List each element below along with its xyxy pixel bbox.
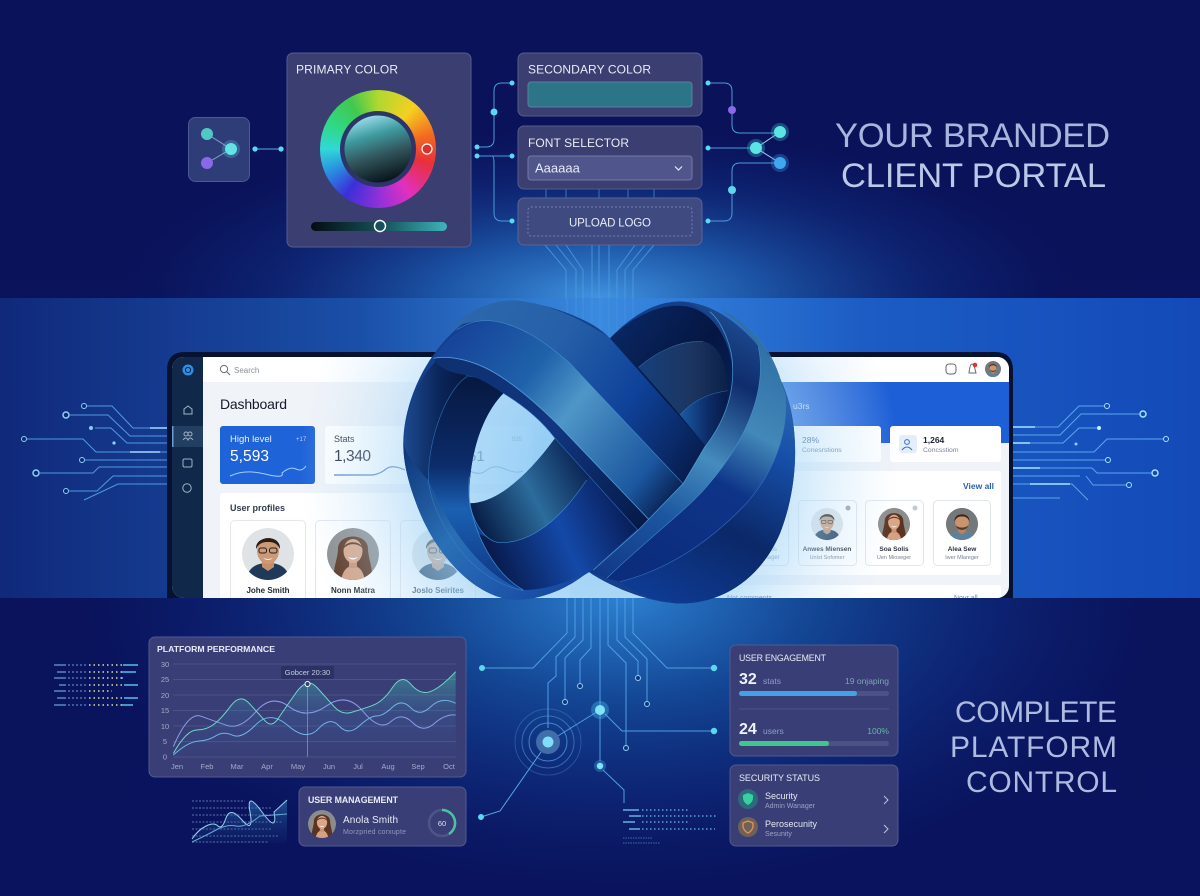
panel: user management xyxy=(299,787,466,846)
panel: font selector: Aaaaaa xyxy=(535,160,581,176)
colour wheel xyxy=(320,90,436,208)
top left icon box xyxy=(188,118,250,182)
panel: user profiles left xyxy=(220,493,464,598)
panel: user management: 60 xyxy=(438,819,446,828)
panel: user profiles right: Soa Solis xyxy=(879,546,909,553)
panel: user profiles right: View all xyxy=(963,481,994,491)
right ring front bands xyxy=(590,302,795,603)
panel: user engagement: 24 xyxy=(739,721,757,738)
title: complete platform control: CONTROL xyxy=(966,766,1117,799)
x axis: Sep xyxy=(411,762,425,771)
top-left bands xyxy=(433,300,705,531)
y axis: 30 xyxy=(161,660,169,669)
left ring lower bands xyxy=(403,359,638,600)
panel: security status: Security xyxy=(765,791,798,801)
chart tooltip: Gobcer 20:30 xyxy=(285,668,330,677)
x axis: Jul xyxy=(353,762,363,771)
panel: upload logo: UPLOAD LOGO xyxy=(569,218,651,230)
panel: user engagement: USER ENGAGEMENT xyxy=(739,653,827,663)
panel: user engagement: 32 xyxy=(739,671,757,688)
x axis: Apr xyxy=(261,762,273,771)
y axis: 0 xyxy=(163,752,167,762)
title: your branded client portal: CLIENT PORTAL xyxy=(841,157,1106,195)
y axis: 25 xyxy=(161,675,169,684)
panel: user engagement: 100% xyxy=(867,726,889,736)
stat card: third: 51 xyxy=(468,448,485,465)
panel: user profiles left: User profiles xyxy=(230,503,285,513)
panel: user profiles right: Iwer Mlareger xyxy=(945,555,979,561)
3D infinity knot logo xyxy=(403,300,795,603)
mini chart xyxy=(192,800,287,843)
panel: secondary color xyxy=(518,53,702,116)
x axis: Jen xyxy=(171,762,183,771)
panel: user profiles right xyxy=(766,471,1001,575)
blue header right xyxy=(782,382,1009,443)
panel: user profiles right: nager xyxy=(764,555,780,561)
stat card: high level: 5,593 xyxy=(230,448,269,465)
right ring inside xyxy=(610,306,733,483)
heading: dashboard: Dashboard xyxy=(220,396,287,412)
panel: user management: USER MANAGEMENT xyxy=(308,795,399,805)
y axis xyxy=(161,660,169,762)
x axis xyxy=(171,762,456,771)
stat card: conversions xyxy=(794,426,881,462)
panel: primary color: PRIMARY COLOR xyxy=(296,62,398,76)
stat card: high level xyxy=(220,426,315,484)
chart tooltip xyxy=(281,666,334,686)
stat card: stats: 1,340 xyxy=(334,448,371,465)
connector: icon to primary colour xyxy=(252,146,284,152)
panel: primary color xyxy=(287,53,471,247)
line chart xyxy=(173,672,456,757)
knot silhouette xyxy=(403,302,795,603)
x axis: Feb xyxy=(201,762,213,771)
title: complete platform control xyxy=(950,696,1117,799)
x axis: May xyxy=(291,762,305,771)
panel: user management: Anola Smith xyxy=(343,815,398,826)
panel: upload logo xyxy=(518,198,702,245)
panel: font selector: FONT SELECTOR xyxy=(528,136,629,150)
panel: lower list card xyxy=(728,585,1001,598)
nodes: glowing dots xyxy=(478,665,717,820)
stat card: high level: High level xyxy=(230,434,272,445)
panel: user engagement: stats xyxy=(763,676,781,686)
panel: user profiles right: Uen Mioseger xyxy=(877,555,911,561)
stat card: 1,264: Concsstiom xyxy=(923,447,959,454)
title: complete platform control: PLATFORM xyxy=(950,731,1117,764)
connectors: primary to right panels xyxy=(474,80,514,224)
decorative data dashes: left xyxy=(54,665,138,705)
top bar: Search xyxy=(234,366,259,375)
panel: user profiles left: Nonn Matra xyxy=(331,586,376,595)
circuit lines: right of tablet xyxy=(1013,404,1168,500)
panel: security status: Perosecunity xyxy=(765,819,818,829)
panel: lower list card: Novr all xyxy=(954,595,978,602)
stat card: 1,264 xyxy=(890,426,1001,462)
panel: user profiles right: Unlst Sofomer xyxy=(810,555,845,561)
panel: lower list card: Not comments xyxy=(727,595,773,602)
stat card: 1,264: 1,264 xyxy=(923,435,945,445)
y axis: 15 xyxy=(161,706,169,715)
panel: platform performance: PLATFORM PERFORMANCE xyxy=(157,644,275,654)
panel: security status: SECURITY STATUS xyxy=(739,773,820,783)
sidebar xyxy=(172,357,203,598)
stat card: stats xyxy=(325,426,410,484)
panel: user profiles right: ebs xyxy=(767,547,777,553)
tablet frame xyxy=(167,352,1013,598)
blue header right: u3rs xyxy=(793,401,810,411)
top bar xyxy=(203,357,1009,382)
panel: font selector xyxy=(518,126,702,189)
y axis: 10 xyxy=(161,722,169,731)
panel: security status: Sesunity xyxy=(765,831,792,838)
screen background xyxy=(172,357,1009,598)
circuit lines: under upload panel xyxy=(545,189,654,598)
panel: security status xyxy=(730,765,898,846)
panel: platform performance xyxy=(149,637,466,777)
x axis: Mar xyxy=(231,762,244,771)
title: your branded client portal xyxy=(835,117,1110,195)
panel: user profiles right: Alea Sew xyxy=(948,546,977,553)
circuit lines: below knot xyxy=(481,598,714,817)
title: complete platform control: COMPLETE xyxy=(955,696,1117,729)
panel: secondary color: SECONDARY COLOR xyxy=(528,62,651,76)
panel: user engagement: 19 onjaping xyxy=(845,676,889,686)
stat card: conversions: Conesrstions xyxy=(802,447,842,454)
node: large target xyxy=(515,709,581,775)
stat card: high level: +17 xyxy=(296,437,307,443)
panel: user profiles left: Johe Smith xyxy=(246,586,290,595)
panel: user engagement xyxy=(730,645,898,756)
circuit lines: left of tablet xyxy=(22,404,167,500)
panel: user management: Morzpried corxupte xyxy=(343,829,406,836)
panel: user profiles left: Joslo Seirites xyxy=(412,586,465,595)
stat card: conversions: 28% xyxy=(802,435,819,445)
panel: user profiles right: Anwes Miensen xyxy=(803,546,851,553)
panel: central blue band xyxy=(0,298,1200,598)
title: your branded client portal: YOUR BRANDED xyxy=(835,117,1110,155)
y axis: 20 xyxy=(161,691,169,700)
x axis: Jun xyxy=(323,762,335,771)
panel: user engagement: users xyxy=(763,726,784,736)
wheel marker xyxy=(422,144,432,154)
tablet dashboard xyxy=(167,352,1013,605)
slider xyxy=(311,222,447,231)
stat card: third xyxy=(471,436,523,474)
connectors: right network xyxy=(706,80,789,224)
screen glow xyxy=(309,357,890,598)
stat card: stats: Stats xyxy=(334,434,355,444)
stat card: third: 535 xyxy=(512,437,523,443)
y axis: 5 xyxy=(163,737,167,746)
decorative data dashes: right xyxy=(623,810,717,843)
panel: security status: Admin Wanager xyxy=(765,803,816,810)
x axis: Oct xyxy=(443,762,456,771)
x axis: Aug xyxy=(381,762,395,771)
